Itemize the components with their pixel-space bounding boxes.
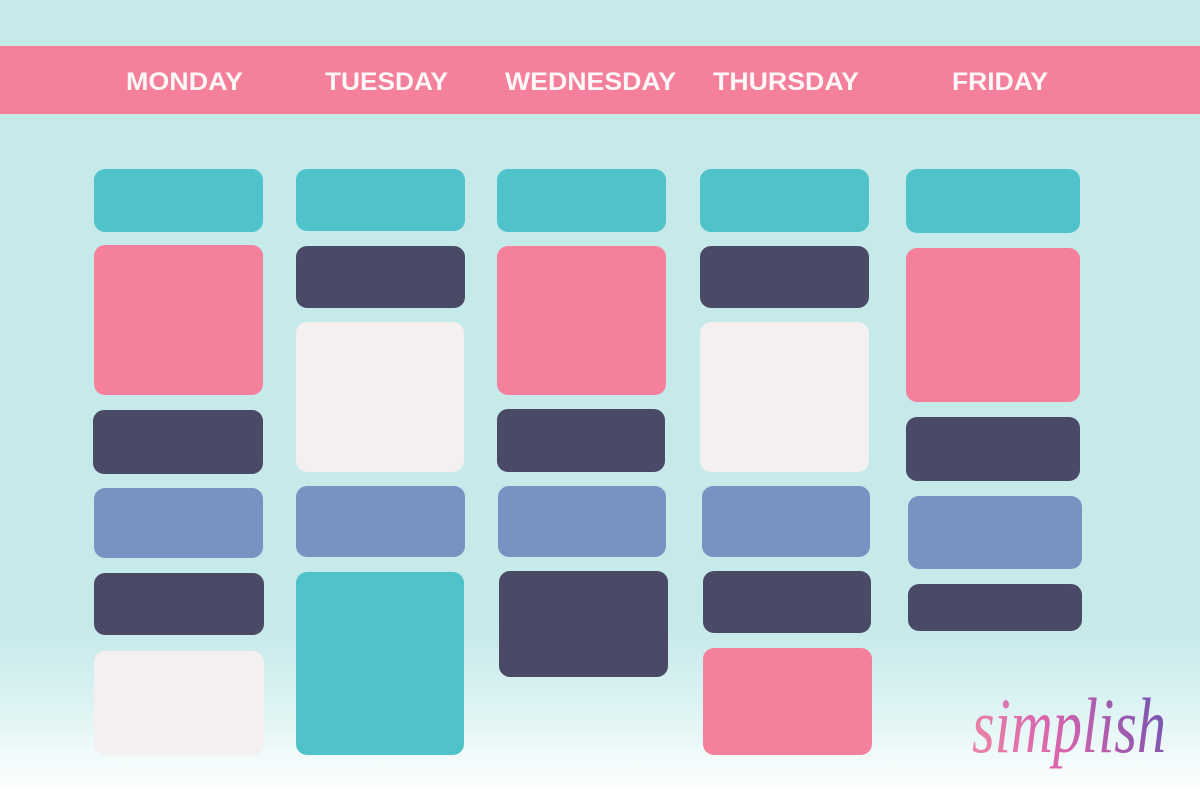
heading: Monday: MONDAY [126, 68, 243, 96]
heading: Friday: FRIDAY [952, 68, 1048, 96]
block: blue [296, 486, 465, 557]
block: dark [700, 246, 869, 308]
heading: Thursday: THURSDAY [713, 68, 859, 96]
block: pink [906, 248, 1080, 402]
block: blue [498, 486, 666, 557]
block: blue [908, 496, 1082, 569]
block: teal [296, 169, 465, 231]
block: teal [700, 169, 869, 232]
block: pink [497, 246, 666, 395]
heading: Tuesday: TUESDAY [325, 68, 448, 96]
block: pink [703, 648, 872, 755]
block: dark [94, 573, 264, 635]
block: dark [703, 571, 871, 633]
block: white [94, 651, 264, 755]
block: teal [94, 169, 263, 232]
block: teal [497, 169, 666, 232]
block: white [296, 322, 464, 472]
heading: Wednesday: WEDNESDAY [505, 68, 676, 96]
panel: Tuesday column [296, 169, 465, 755]
panel: Wednesday column [497, 169, 668, 677]
block: teal [906, 169, 1080, 233]
block: blue [94, 488, 263, 558]
block: blue [702, 486, 870, 557]
panel: Friday column [906, 169, 1082, 631]
block: dark [906, 417, 1080, 481]
block: dark [296, 246, 465, 308]
panel: Thursday column [700, 169, 872, 755]
block: teal tall [296, 572, 464, 755]
block: dark [497, 409, 665, 472]
panel: Monday column [93, 169, 264, 755]
block: dark [908, 584, 1082, 631]
block: dark [93, 410, 263, 474]
header band with weekdays [0, 46, 1200, 114]
block: white [700, 322, 869, 472]
block: pink [94, 245, 263, 395]
block: dark [499, 571, 668, 677]
